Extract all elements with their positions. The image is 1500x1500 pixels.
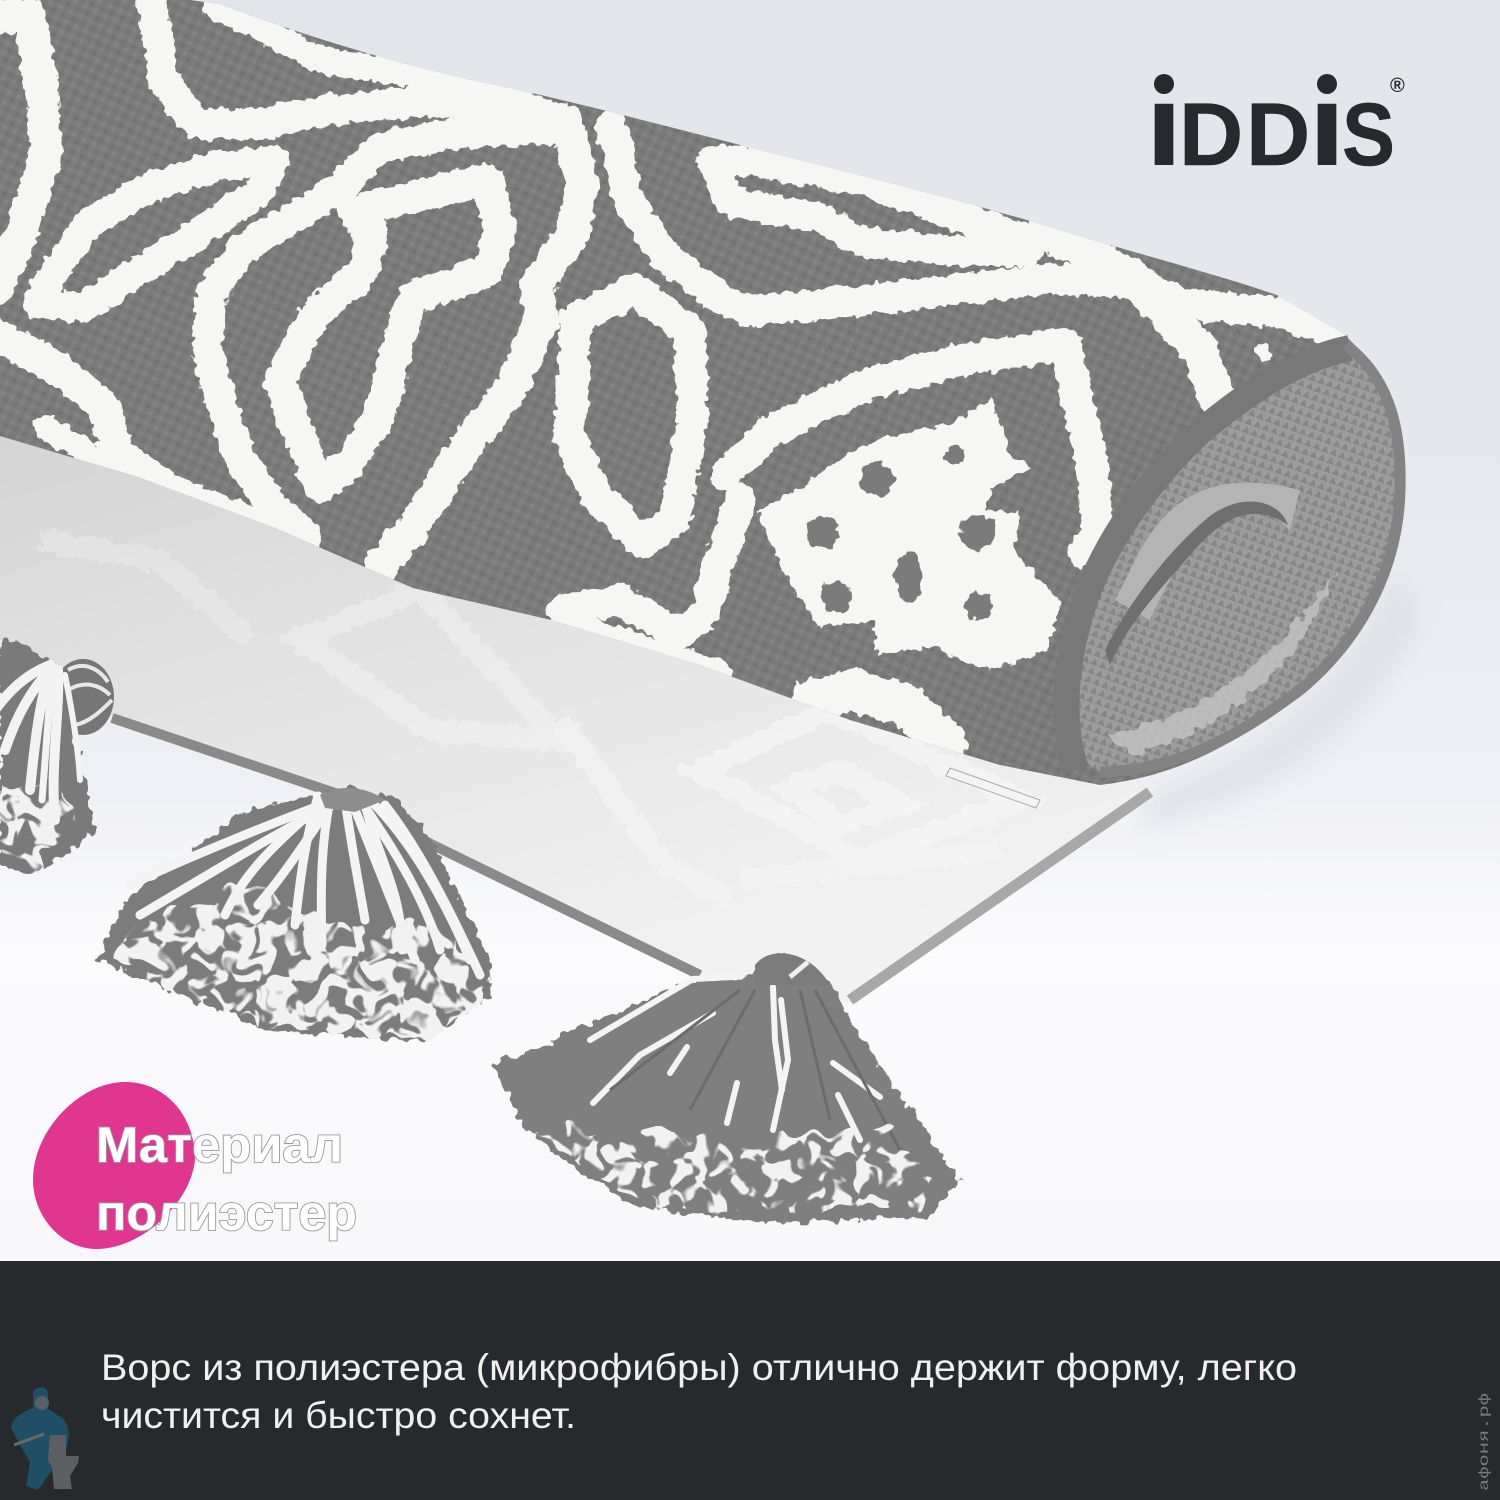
logo: IDDIS: ®: [1390, 75, 1405, 97]
logo: IDDIS: I: [1146, 84, 1182, 184]
shadow under rug: [1140, 570, 1420, 830]
description text: [101, 1347, 1297, 1436]
tassel top left: [0, 640, 114, 877]
icon: plumber with toilet: [11, 1387, 79, 1490]
rolled rug body: [0, 0, 1420, 800]
rug photo: [0, 0, 1420, 1223]
logo: IDDIS: D: [1179, 84, 1243, 184]
watermark: афоня.рф: [1477, 1393, 1493, 1491]
rug underside mat: [0, 425, 1160, 1003]
tassel middle: [97, 787, 491, 1041]
description text: чистится и быстро сохнет.: [101, 1395, 576, 1436]
logo: IDDIS: D: [1246, 84, 1310, 184]
tassel bottom: [493, 953, 960, 1223]
logo: IDDIS: I: [1309, 84, 1345, 184]
care label: [946, 768, 1040, 808]
heading: material: [96, 1117, 357, 1241]
light pile at the edge of the backing: [1110, 570, 1335, 755]
pink blob: [33, 1082, 195, 1249]
faded pattern on the mat: [40, 540, 1020, 900]
inner fold of rug: [1115, 483, 1300, 620]
description text: Ворс из полиэстера (микрофибры) отлично держит форму, легко: [101, 1347, 1297, 1388]
mat edge binding: [112, 718, 700, 975]
heading: material: Материал: [96, 1117, 343, 1173]
logo: IDDIS: S: [1342, 84, 1395, 184]
roll end with backing: [1066, 345, 1400, 772]
heading: material: полиэстер: [96, 1185, 357, 1241]
logo: IDDIS: [1146, 74, 1405, 184]
white flower motif: [758, 397, 1061, 671]
dark footer band: [0, 1261, 1500, 1500]
logo dots: [1154, 74, 1174, 94]
rim binding: [1066, 348, 1350, 770]
white pile pattern: [0, 0, 1332, 744]
